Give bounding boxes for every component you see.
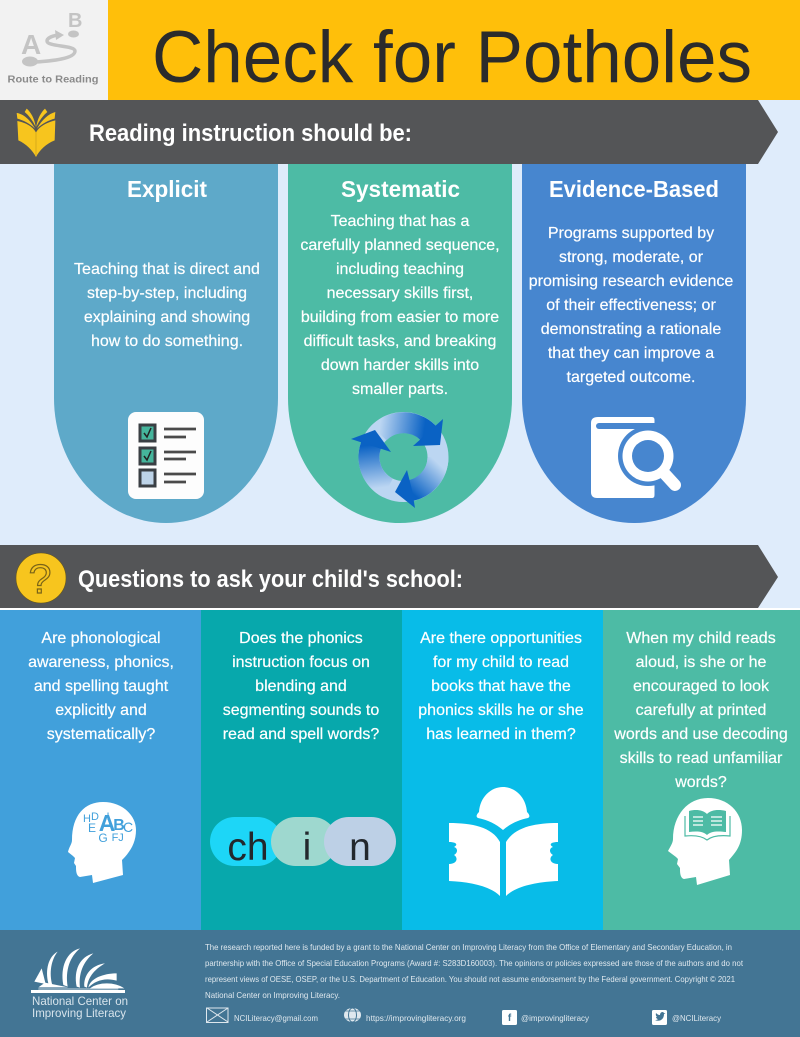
icon: checklist (128, 412, 204, 499)
icon: open book (17, 109, 55, 157)
contact: twitter: @NCILiteracy (672, 1013, 722, 1023)
text: Systematic definition: necessary skills first, (327, 285, 473, 302)
text: question 2: Does the phonics (239, 630, 363, 647)
icon: question mark: ? (29, 556, 51, 602)
text: Explicit definition: how to do something. (91, 333, 243, 350)
icon: head with book (668, 798, 742, 885)
text: question 3: for my child to read (433, 654, 569, 671)
footer (0, 930, 800, 1037)
text: question 4: encouraged to look (633, 678, 770, 695)
icon: cycle arrows (351, 419, 443, 508)
icon: head with letters: H (83, 813, 91, 825)
text: question 3: has learned in them? (426, 726, 576, 743)
text: Systematic definition: carefully planned sequence, (300, 237, 500, 254)
text: question 4: When my child reads (626, 630, 776, 647)
text: Systematic definition: down harder skills into (321, 357, 479, 374)
banner: Reading instruction should be: Reading instruction should be: (89, 120, 412, 147)
text: Systematic definition: smaller parts. (352, 381, 448, 398)
text: Systematic definition: including teaching (336, 261, 464, 278)
text: funding disclaimer: represent views of OESE, OSEP, or the U.S. Department of Education. You should not assume endorsement by the Federal government. Copyright © 2021 (205, 974, 735, 984)
text: question 1: explicitly and (55, 702, 147, 719)
text: question 1: awareness, phonics, (28, 654, 174, 671)
text: question 4: aloud, is she or he (636, 654, 766, 671)
text: funding disclaimer (205, 942, 744, 1000)
text: question 4: carefully at printed (636, 702, 766, 719)
text: question 2 (223, 630, 379, 743)
contact: facebook: @improvingliteracy (521, 1013, 590, 1023)
icon: head with letters: E (88, 821, 96, 835)
logo: Route to Reading: A (21, 29, 41, 60)
contact: facebook (502, 1010, 590, 1025)
logo: Route to Reading: Route to Reading (8, 74, 98, 86)
text: Systematic definition: Teaching that has a (331, 213, 469, 230)
text: question 4: skills to read unfamiliar (620, 750, 783, 767)
icon: head with letters: D (91, 811, 99, 823)
contact: email (206, 1008, 318, 1023)
banner: Questions to ask: Questions to ask your child's school: (78, 566, 463, 593)
text: Evidence-Based definition (529, 225, 733, 386)
icon: head with letters: I (106, 811, 110, 823)
banner: Questions to ask (0, 545, 778, 608)
text: question 1: and spelling taught (34, 678, 169, 695)
text: question 1: Are phonological (41, 630, 161, 647)
text: Evidence-Based definition: of their effectiveness; or (546, 297, 716, 314)
graphic: chin sound pills: ch (227, 826, 269, 869)
logo: National Center on Improving Literacy (31, 948, 128, 1020)
graphic: chin sound pills: n (349, 826, 371, 869)
graphic: chin sound pills: i (303, 826, 311, 869)
text: Systematic definition: difficult tasks, and breaking (304, 333, 496, 350)
header band (0, 0, 800, 100)
text: question 2: read and spell words? (223, 726, 379, 743)
panel: question 3 (402, 610, 603, 930)
panel: question 2 (201, 610, 402, 930)
text: funding disclaimer: The research reported here is funded by a grant to the National Center on Improving Literacy from the Office of Elementary and Secondary Education, in (205, 942, 732, 952)
text: question 4 (613, 630, 788, 791)
text: question 2: segmenting sounds to (223, 702, 379, 719)
contact: facebook: f (508, 1013, 512, 1024)
text: Explicit definition: Teaching that is direct and (74, 261, 260, 278)
icon: head with letters: F (112, 832, 119, 844)
panel: Explicit: Explicit (127, 176, 207, 202)
text: question 3: phonics skills he or she (418, 702, 584, 719)
logo: Route to Reading (0, 0, 108, 100)
text: question 3: books that have the (431, 678, 571, 695)
text: Explicit definition (74, 261, 260, 350)
text: Systematic definition (300, 213, 500, 398)
logo: Route to Reading: B (68, 10, 82, 32)
icon: book with magnifier (591, 417, 678, 498)
text: question 1: systematically? (47, 726, 155, 743)
text: Evidence-Based definition: promising research evidence (529, 273, 733, 290)
panel: Evidence-Based: Evidence-Based (549, 176, 719, 202)
panel: question 1 (0, 610, 201, 930)
icon: head with letters: B (113, 817, 125, 834)
text: Evidence-Based definition: targeted outcome. (567, 369, 695, 386)
text: Explicit definition: step-by-step, including (87, 285, 247, 302)
icon: head with letters: C (123, 819, 133, 835)
text: Evidence-Based definition: Programs supported by (548, 225, 714, 242)
text: question 4: words and use decoding (613, 726, 788, 743)
banner: Reading instruction should be (0, 100, 778, 164)
logo: National Center on Improving Literacy: Improving Literacy (32, 1006, 126, 1020)
panel: Explicit (54, 164, 278, 523)
contact: email: NCILiteracy@gmail.com (234, 1013, 318, 1023)
contact: website: https://improvingliteracy.org (366, 1013, 466, 1023)
icon: head with letters (68, 802, 136, 883)
text: Explicit definition: explaining and showing (84, 309, 250, 326)
icon: question mark (16, 553, 66, 603)
text: question 2: instruction focus on (232, 654, 370, 671)
text: question 4: words? (674, 774, 727, 791)
icon: head with letters: G (98, 831, 108, 845)
text: funding disclaimer: partnership with the Office of Special Education Programs (Award #: S283D160003). The opinions or policies expressed are those of the authors and do not (205, 958, 744, 968)
text: Systematic definition: building from easier to more (301, 309, 499, 326)
panel: question 4 (603, 610, 800, 930)
icon: head with letters: A (99, 810, 115, 836)
panel: Systematic (288, 164, 512, 523)
icon: head with letters: J (118, 832, 124, 844)
text: Evidence-Based definition: that they can improve a (548, 345, 714, 362)
text: funding disclaimer: National Center on Improving Literacy. (205, 990, 340, 1000)
contact: twitter (652, 1010, 722, 1025)
graphic: chin sound pills (210, 817, 396, 869)
text: Evidence-Based definition: strong, moderate, or (559, 249, 704, 266)
text: question 3: Are there opportunities (420, 630, 582, 647)
text: question 2: blending and (255, 678, 347, 695)
text: question 3 (418, 630, 584, 743)
icon: person reading book (449, 787, 558, 896)
logo: National Center on Improving Literacy: National Center on (32, 994, 128, 1008)
panel: Evidence-Based (522, 164, 746, 523)
title: Check for Potholes (152, 17, 752, 98)
contact: website (344, 1008, 466, 1023)
panel: Systematic: Systematic (341, 176, 460, 202)
text: Evidence-Based definition: demonstrating a rationale (541, 321, 721, 338)
text: question 1 (28, 630, 174, 743)
